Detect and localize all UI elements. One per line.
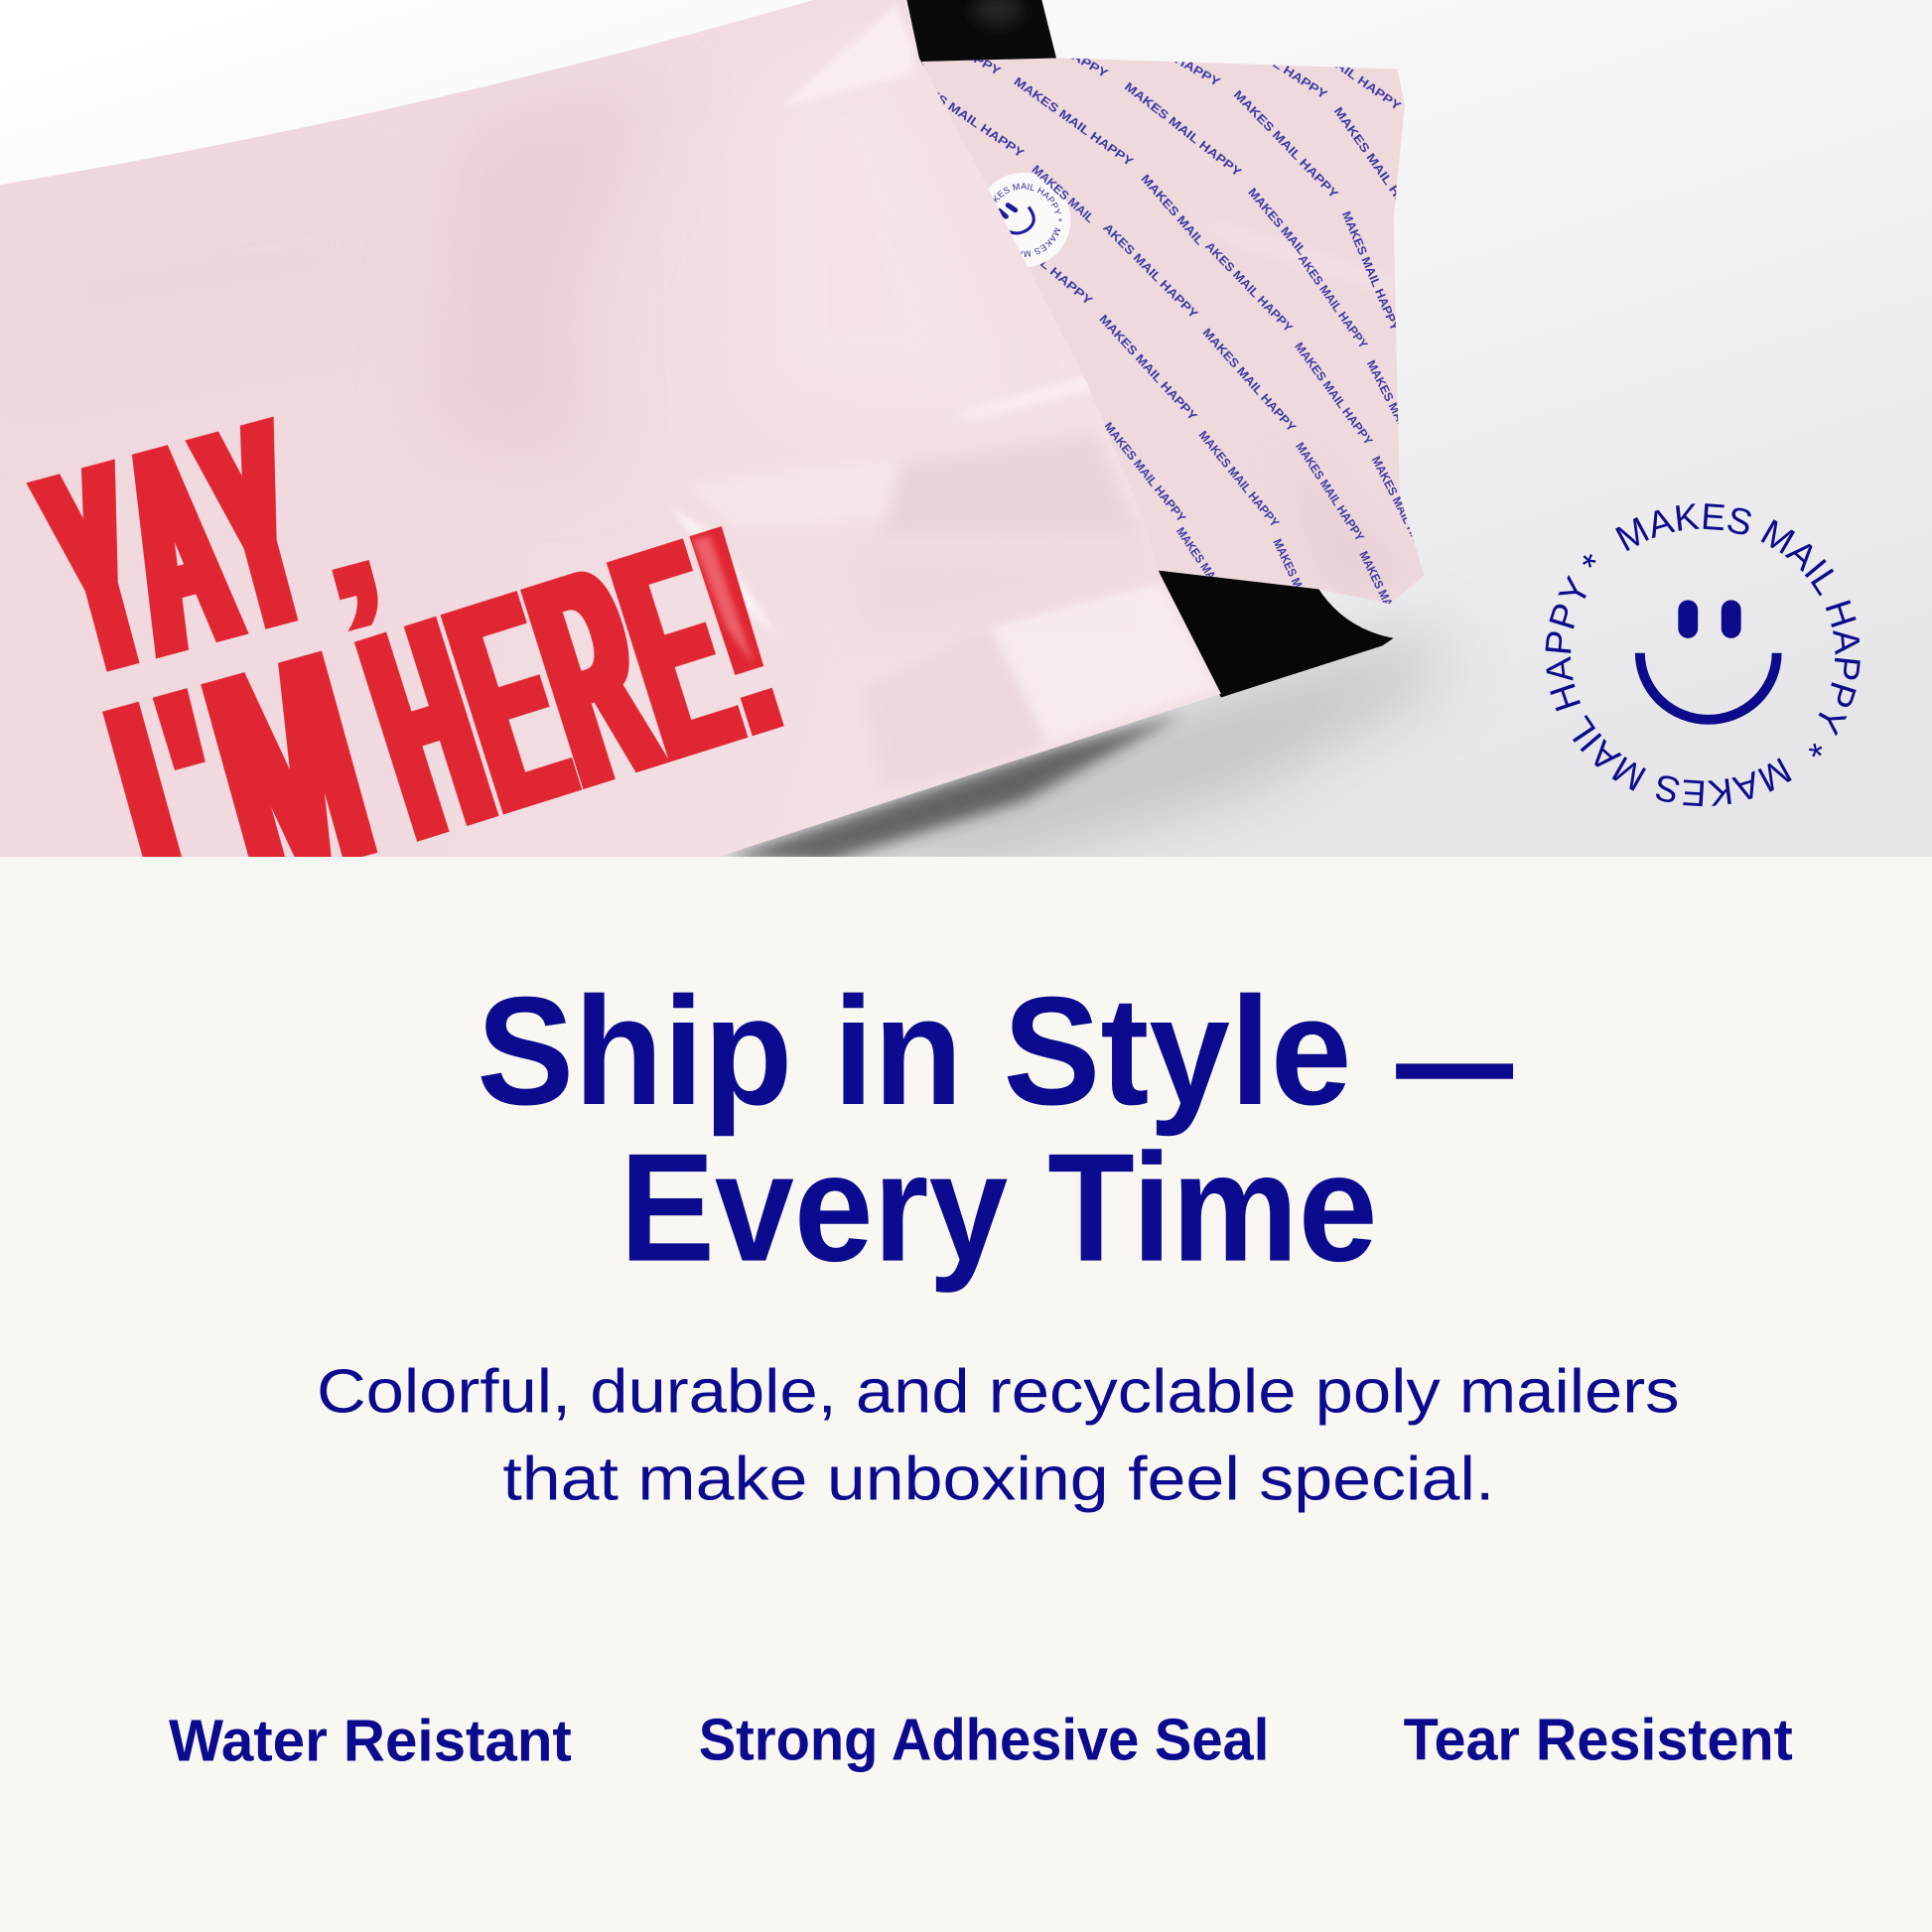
pattern text: fragment beside sticker: IL HAPPY	[1035, 253, 1095, 308]
badge eye: right	[1722, 600, 1741, 638]
pattern text: top fragments: MAKES MAIL HAPPY	[1091, 5, 1222, 89]
sticker: round smiley	[989, 173, 1070, 267]
pattern text: row E	[1173, 525, 1418, 654]
pattern text: row D	[1101, 420, 1435, 565]
pattern text: row B: AKES MAIL HAPPY	[1100, 220, 1200, 321]
plastic sheen and folds	[0, 5, 1213, 788]
front pink mailer	[0, 0, 1221, 977]
pattern text: row A: MAKES MAIL HAPPY	[899, 69, 1027, 160]
pattern text: row E: MAKES MAIL HAPPY	[1356, 549, 1418, 654]
feature: tear resistant: Tear Resistent	[1404, 1706, 1793, 1772]
pattern text: row B: MAKES MAIL HAPPY	[1339, 209, 1402, 333]
photo panel: mailers on white surface	[0, 0, 1932, 857]
heading line 2: Every Time	[620, 1122, 1378, 1294]
feature labels	[169, 1706, 1793, 1773]
black inner flap: bottom	[1152, 564, 1394, 697]
badge: makes mail happy smiley	[1545, 503, 1861, 806]
subheading line 1: Colorful, durable, and recyclable poly mailers	[317, 1357, 1680, 1426]
slogan word: YAY: YAY	[16, 357, 337, 740]
badge smile	[1640, 653, 1777, 720]
pattern text: row A: MAKES MAIL HAPPY	[1122, 79, 1244, 180]
highlight over slogan exclamation mark	[692, 536, 755, 665]
pattern text: row C: MAKES MAIL HAPPY	[1200, 326, 1299, 434]
inner mailer with repeating pattern	[921, 58, 1424, 604]
text panel background	[0, 857, 1932, 1932]
pattern text: row B: AKES MAIL HAPPY	[1296, 252, 1370, 351]
sticker smiley face	[1000, 206, 1034, 233]
pattern text: row A: MAKES MAIL HAPPY	[1231, 87, 1341, 201]
badge eye: left	[1678, 600, 1698, 638]
pattern text: row A: MAKES MAIL HAPPY	[1331, 104, 1426, 231]
slogan comma: ,	[272, 402, 406, 648]
pattern text: row A	[937, 77, 1397, 200]
mailer slogan: YAY, I'M HERE!	[16, 357, 812, 977]
pattern text: row C: MAKES MAIL HAPPY	[1096, 312, 1200, 423]
black inner flap: top	[899, 0, 1057, 67]
sticker circular text: MAKES MAIL HAPPY * MAKES MAIL HAPPY *	[993, 183, 1062, 257]
subheading line 2: that make unboxing feel special.	[502, 1445, 1494, 1513]
pattern text: top fragments: MAKES MAIL HAPPY	[1201, 12, 1329, 101]
pattern text: row B: MAKES MAIL	[1030, 163, 1097, 226]
pattern text: row C: MAKES MAIL HAPPY	[1364, 357, 1433, 474]
feature: adhesive seal: Strong Adhesive Seal	[699, 1706, 1269, 1772]
pattern text: top fragments: MAKES MAIL HAPPY	[1278, 19, 1404, 113]
slogan word: HERE!: HERE!	[336, 463, 812, 904]
pattern text: row B: MAKES MAIL	[1245, 186, 1310, 258]
slogan word: I'M: I'M	[81, 584, 408, 977]
pattern text: row D: MAKES MAIL HAPPY	[1369, 454, 1435, 565]
heading line 1 dash: —	[1396, 974, 1514, 1146]
pattern text: row D: MAKES MAIL HAPPY	[1293, 440, 1367, 543]
heading line 1 words: Ship in Style	[477, 965, 1351, 1137]
pattern text: row E: MAKES MAIL HAPPY	[1173, 525, 1247, 624]
pattern text: row C	[1096, 312, 1433, 474]
pattern text: row C: MAKES MAIL HAPPY	[1292, 340, 1375, 448]
pattern text: row D: MAKES MAIL HAPPY	[1196, 428, 1282, 530]
pattern text: row B	[1030, 163, 1402, 351]
feature: water resistant: Water Reistant	[169, 1707, 572, 1773]
pattern text: row A: MAKES MAIL HAPPY	[1012, 74, 1136, 169]
badge circular text: MAKES MAIL HAPPY * MAKES MAIL HAPPY *	[1545, 503, 1861, 806]
cast shadow under mailers	[716, 628, 1442, 869]
heading	[477, 965, 1514, 1294]
pattern text: row D: MAKES MAIL HAPPY	[1101, 420, 1188, 524]
pattern text: row B: AKES MAIL HAPPY	[1202, 239, 1296, 335]
subheading	[317, 1357, 1680, 1513]
pattern text: row E: MAKES MAIL HAPPY	[1270, 537, 1329, 643]
pattern text: top fragments	[971, 58, 1402, 109]
pattern text: row B: MAKES MAIL	[1138, 172, 1207, 248]
